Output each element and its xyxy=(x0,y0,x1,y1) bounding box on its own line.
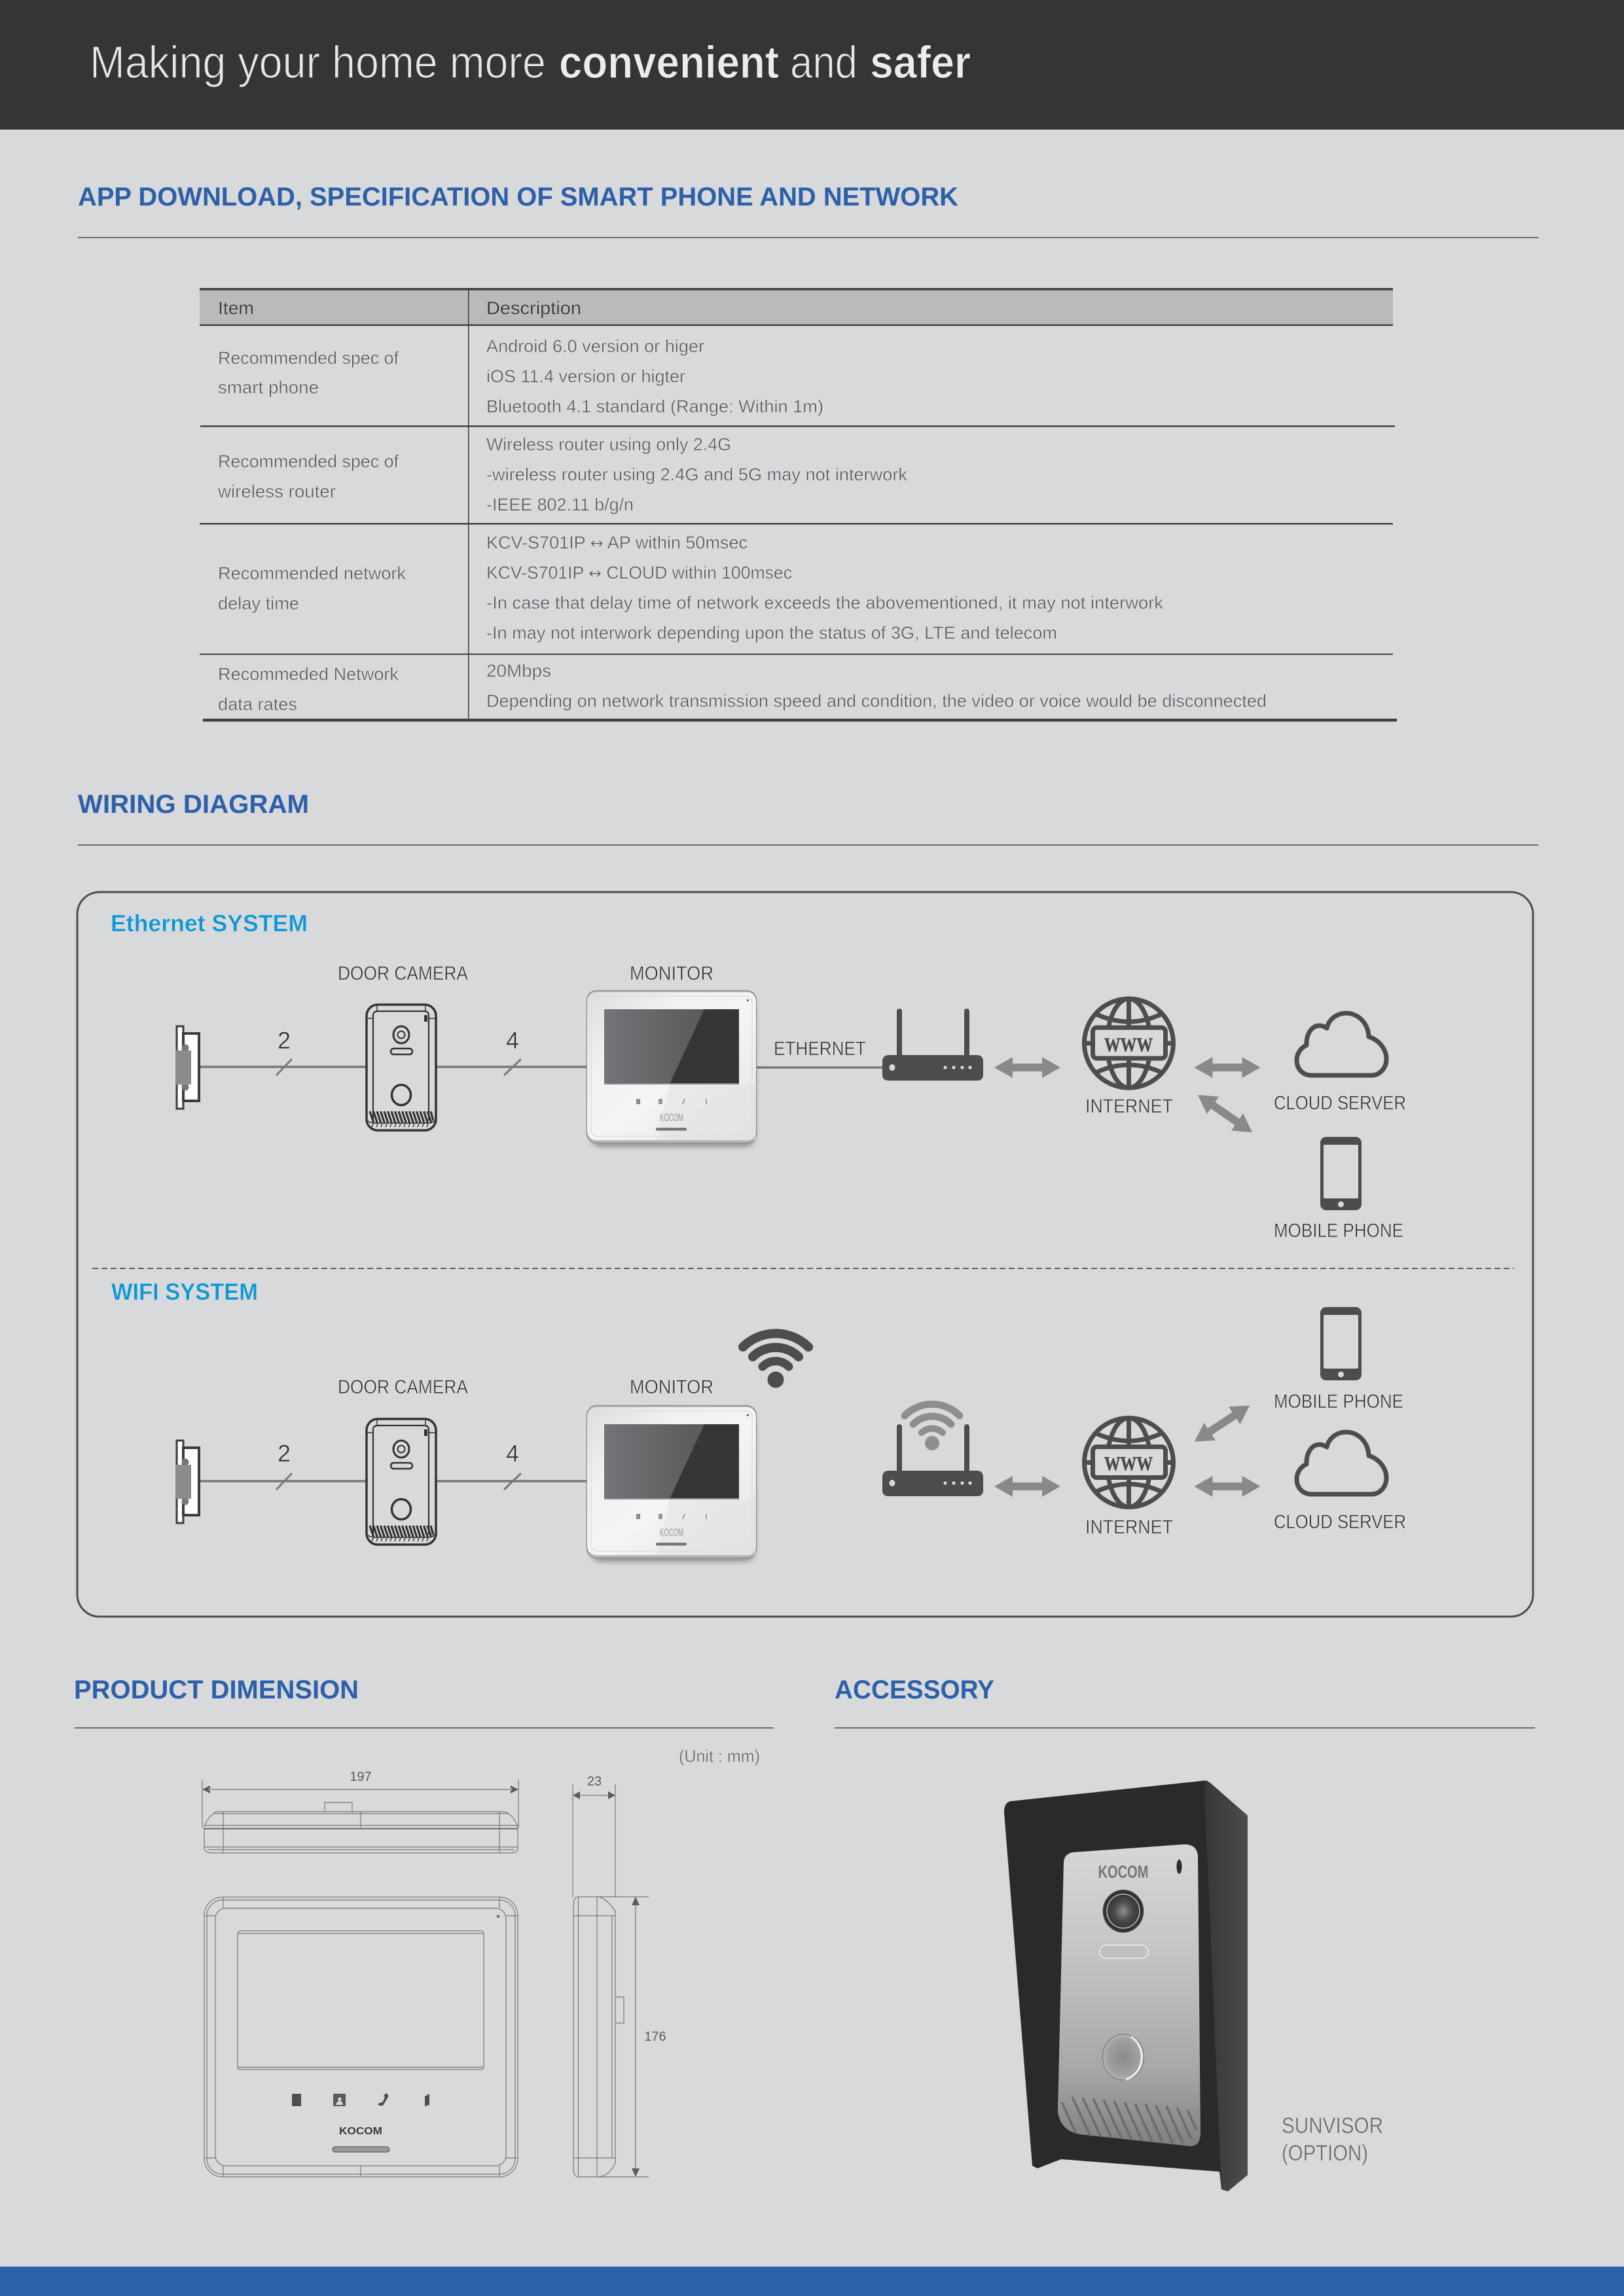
dimension drawing: side view with depth 23 and height 176: 23 xyxy=(587,1774,602,1789)
label: sunvisor option xyxy=(1282,2113,1383,2166)
icon: wall power box xyxy=(175,1441,199,1523)
specification table: Recommended spec of xyxy=(218,348,399,368)
specification table: 20Mbps xyxy=(486,661,551,681)
specification table: smart phone xyxy=(218,378,319,397)
icon: internet globe: WWW xyxy=(1104,1453,1153,1475)
arrow: internet to mobile phone xyxy=(1192,1086,1258,1141)
icon: internet globe xyxy=(1084,1418,1173,1507)
wifi system xyxy=(111,1278,1406,1562)
specification table: KCV-S701IP ↔ CLOUD within 100msec xyxy=(486,563,792,583)
icon: monitor xyxy=(586,1406,757,1562)
specification table: -In case that delay time of network exceeds the abovementioned, it may not interwork xyxy=(486,593,1164,613)
call button xyxy=(1102,2034,1144,2080)
icon: door camera xyxy=(367,1005,436,1130)
dimension drawing: front view: KOCOM xyxy=(339,2126,382,2137)
specification table: -IEEE 802.11 b/g/n xyxy=(486,495,634,514)
door camera plate xyxy=(1058,1844,1200,2146)
logo: KOCOM xyxy=(1098,1862,1148,1882)
specification table: Bluetooth 4.1 standard (Range: Within 1m) xyxy=(486,397,823,416)
unit note: (Unit : mm) xyxy=(679,1746,760,1766)
specification table: -wireless router using 2.4G and 5G may not interwork xyxy=(486,465,907,484)
label: internet: INTERNET xyxy=(1085,1516,1173,1538)
dimension drawing: top view with width 197: 197 xyxy=(350,1770,372,1784)
dimension drawing: side view with depth 23 and height 176 xyxy=(573,1774,666,2177)
icon: router xyxy=(882,1011,983,1081)
label: ethernet: ETHERNET xyxy=(774,1038,866,1060)
footer band xyxy=(0,2267,1624,2296)
specification table: Description xyxy=(486,298,581,318)
icon: door camera xyxy=(367,1419,436,1545)
icon: wall power box xyxy=(175,1026,199,1109)
cables: 4 xyxy=(506,1440,519,1467)
specification table: data rates xyxy=(218,694,297,714)
specification table: Android 6.0 version or higer xyxy=(486,336,704,356)
lens xyxy=(1104,1890,1143,1932)
speaker grill xyxy=(1062,2097,1197,2144)
heading: accessory: ACCESSORY xyxy=(835,1676,994,1704)
panel: wiring systems xyxy=(77,892,1533,1617)
heading: wifi system: WIFI SYSTEM xyxy=(111,1278,258,1305)
arrow: internet to cloud xyxy=(1194,1476,1261,1497)
heading: app download and specification: APP DOWNLOAD, SPECIFICATION OF SMART PHONE AND NETWORK xyxy=(78,183,958,211)
label: mobile phone: MOBILE PHONE xyxy=(1274,1220,1403,1242)
cables: 2 xyxy=(278,1027,291,1054)
specification table: iOS 11.4 version or higter xyxy=(486,367,685,386)
cables: 4 xyxy=(506,1027,519,1054)
label: monitor: MONITOR xyxy=(630,963,713,984)
dimension drawing: top view with width 197 xyxy=(202,1770,518,1853)
cables: 2 xyxy=(278,1440,291,1467)
name slot xyxy=(1100,1945,1148,1958)
specification table: delay time xyxy=(218,594,299,613)
icon: monitor: KOCOM xyxy=(660,1526,683,1539)
header band with title: convenient xyxy=(559,37,779,88)
label: sunvisor option: (OPTION) xyxy=(1282,2141,1368,2166)
cables xyxy=(199,1027,882,1075)
label: monitor: MONITOR xyxy=(630,1376,713,1398)
label: door camera: DOOR CAMERA xyxy=(338,963,468,984)
arrow: router to internet xyxy=(994,1476,1060,1497)
icon: mobile phone xyxy=(1320,1137,1362,1210)
icon: cloud xyxy=(1297,1432,1386,1494)
header band with title: Making your home more xyxy=(90,37,546,88)
icon: cloud xyxy=(1297,1013,1386,1075)
dimension drawing: side view with depth 23 and height 176: 176 xyxy=(644,2030,666,2044)
accessory: sunvisor with door camera xyxy=(1004,1780,1248,2191)
specification table: KCV-S701IP ↔ AP within 50msec xyxy=(486,533,748,552)
arrow: internet to mobile phone xyxy=(1189,1397,1255,1450)
label: internet: INTERNET xyxy=(1085,1096,1173,1117)
icon: wifi signal from monitor xyxy=(743,1333,808,1388)
icon: monitor: KOCOM xyxy=(660,1111,683,1124)
specification table: -In may not interwork depending upon the status of 3G, LTE and telecom xyxy=(486,623,1057,643)
ethernet system xyxy=(111,910,1406,1242)
header band with title: safer xyxy=(870,37,971,88)
icons: monitor buttons xyxy=(292,2093,429,2106)
specification table: wireless router xyxy=(217,482,336,501)
heading: wiring diagram: WIRING DIAGRAM xyxy=(78,790,309,819)
header band with title xyxy=(0,0,1624,130)
specification table: Recommeded Network xyxy=(218,664,399,684)
icon: internet globe: WWW xyxy=(1104,1034,1153,1056)
heading: product dimension: PRODUCT DIMENSION xyxy=(74,1676,359,1704)
specification table: Depending on network transmission speed and condition, the video or voice would be disconnected xyxy=(486,691,1267,711)
specification table xyxy=(200,288,1397,721)
icon: wifi signal from router xyxy=(905,1404,960,1450)
specification table: Item xyxy=(218,298,254,318)
arrow: internet to cloud xyxy=(1194,1057,1261,1078)
specification table: Recommended network xyxy=(218,564,406,583)
header band with title: and xyxy=(790,37,857,88)
icon: mobile phone xyxy=(1320,1307,1362,1380)
specification table: Recommended spec of xyxy=(218,452,399,471)
heading: ethernet system: Ethernet SYSTEM xyxy=(111,910,308,937)
dimension drawing: front view xyxy=(204,1897,518,2177)
icon: internet globe xyxy=(1084,999,1173,1088)
specification table: Wireless router using only 2.4G xyxy=(486,435,731,454)
icon: monitor xyxy=(586,991,757,1147)
icon: wifi router xyxy=(882,1427,983,1496)
label: door camera: DOOR CAMERA xyxy=(338,1376,468,1398)
label: mobile phone: MOBILE PHONE xyxy=(1274,1391,1403,1412)
cables xyxy=(199,1440,586,1489)
label: cloud server: CLOUD SERVER xyxy=(1274,1511,1406,1533)
label: sunvisor option: SUNVISOR xyxy=(1282,2113,1383,2138)
arrow: router to internet xyxy=(994,1057,1060,1078)
label: cloud server: CLOUD SERVER xyxy=(1274,1092,1406,1114)
